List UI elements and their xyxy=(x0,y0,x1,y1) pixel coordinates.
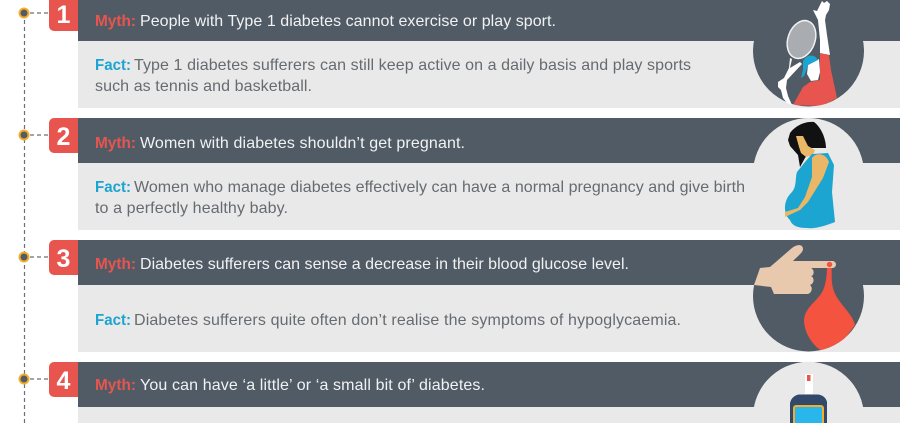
fact text 3: Diabetes sufferers quite often don’t realise the symptoms of hypoglycaemia. xyxy=(134,312,681,329)
fact text 3: Fact: xyxy=(95,312,131,329)
number badge 3: 3 xyxy=(57,245,70,273)
myth text 1: People with Type 1 diabetes cannot exercise or play sport. xyxy=(140,13,556,30)
myth text 1: Myth: xyxy=(95,13,136,30)
panel: myth 4 xyxy=(49,362,900,423)
icon: tennis player xyxy=(753,0,864,106)
myth banner 2 xyxy=(78,118,900,163)
myth banner 4 xyxy=(78,362,900,407)
myth text 3: Diabetes sufferers can sense a decrease in their blood glucose level. xyxy=(140,256,629,273)
myth text 4: You can have ‘a little’ or ‘a small bit of’ diabetes. xyxy=(140,377,485,394)
number badge 2 xyxy=(49,118,78,153)
number badge 4: 4 xyxy=(57,367,71,395)
fact text 2: Women who manage diabetes effectively can have a normal pregnancy and give birth xyxy=(134,179,745,196)
panel: myth 2 xyxy=(49,118,900,230)
fact background 2 xyxy=(78,163,900,230)
fact text 2: to a perfectly healthy baby. xyxy=(95,200,288,217)
myth text 3: Myth: xyxy=(95,256,136,273)
myth text 2: Myth: xyxy=(95,135,136,152)
number badge 1: 1 xyxy=(57,1,71,29)
number badge 2: 2 xyxy=(57,123,70,151)
fact text 1 xyxy=(95,57,691,95)
fact text 2 xyxy=(95,179,745,217)
myth banner 1 xyxy=(78,0,900,41)
icon: pregnant woman xyxy=(753,118,864,229)
number badge 4 xyxy=(49,362,78,397)
fact background 1 xyxy=(78,41,900,108)
fact text 1: Type 1 diabetes sufferers can still keep active on a daily basis and play sports xyxy=(134,57,691,74)
timeline: dashed vertical line with connector nodes xyxy=(20,8,49,423)
fact text 1: such as tennis and basketball. xyxy=(95,78,312,95)
fact text 2: Fact: xyxy=(95,179,131,196)
icon: blood glucose meter xyxy=(753,362,864,423)
icon: finger with blood drop xyxy=(753,240,864,352)
panel: myth 3 xyxy=(49,240,900,352)
number badge 1 xyxy=(49,0,78,31)
panel: myth 1 xyxy=(49,0,900,108)
number badge 3 xyxy=(49,240,78,275)
myth text 2: Women with diabetes shouldn’t get pregnant. xyxy=(140,135,465,152)
myth text 4: Myth: xyxy=(95,377,136,394)
fact text 1: Fact: xyxy=(95,57,131,74)
fact background 3 xyxy=(78,285,900,352)
myth banner 3 xyxy=(78,240,900,285)
fact background 4 xyxy=(78,407,900,423)
